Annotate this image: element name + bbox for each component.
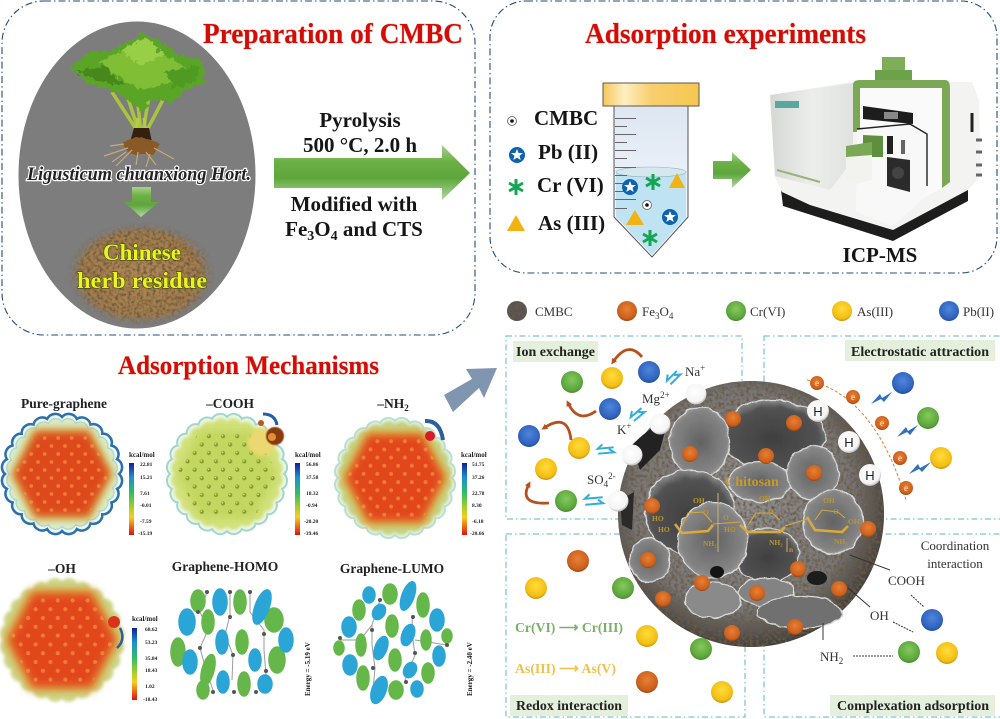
legend: ions: Cr (VI)	[537, 173, 604, 197]
species name: Ligusticum chuanxiong Hort.	[26, 164, 251, 185]
surface H sites: H	[865, 468, 875, 483]
panel: redox interaction	[506, 534, 745, 717]
map: pure graphene: Pure-graphene	[21, 396, 107, 411]
legend: particles: 4	[669, 311, 674, 321]
map: OH graphene: 18.43	[145, 668, 158, 674]
legend: particles	[507, 301, 994, 321]
instrument label: ICP-MS	[843, 243, 917, 267]
legend: particles: Pb(II)	[963, 304, 994, 319]
SEM particle	[618, 381, 884, 647]
map: NH2 graphene: -20.66	[470, 531, 484, 537]
title: adsorption mechanisms: Adsorption Mechanisms	[118, 351, 379, 380]
map: NH2 graphene: kcal/mol	[461, 451, 487, 459]
chart: graphene HOMO orbitals: Graphene-HOMO	[172, 559, 278, 574]
icon: ICP-MS instrument	[770, 57, 982, 241]
residue label line 2: herb residue	[77, 268, 207, 293]
chitosan structure: O	[833, 507, 839, 516]
legend: particles: CMBC	[535, 304, 573, 319]
chart: graphene LUMO orbitals	[334, 561, 474, 706]
modifier label: and CTS	[338, 217, 423, 241]
map: NH2 graphene: 37.26	[472, 475, 485, 481]
temperature label: 500 °C, 2.0 h	[303, 133, 417, 157]
complexation labels: NH	[820, 649, 839, 664]
attracted ions	[892, 372, 952, 469]
map: NH2 graphene	[335, 396, 487, 538]
legend: particles: 3	[655, 311, 660, 321]
label: complexation adsorption: Complexation adsorption	[837, 699, 989, 714]
chart: graphene LUMO orbitals: Graphene-LUMO	[340, 561, 444, 576]
label: electrostatic attraction	[845, 340, 995, 361]
complexed ions	[898, 609, 958, 664]
legend: ions: As (III)	[538, 211, 605, 235]
green ball at redox boundary	[612, 577, 634, 599]
ion labels: +	[700, 363, 705, 373]
chitosan structure: O	[723, 513, 729, 522]
chitosan structure: HO	[658, 525, 670, 534]
equilibrium arrows	[584, 368, 680, 505]
map: COOH graphene: 56.86	[306, 462, 319, 468]
electron arc: e	[851, 392, 855, 402]
map: NH2 graphene: 51.75	[472, 462, 485, 468]
panel: adsorption experiments	[490, 1, 997, 273]
chitosan structure: OH	[693, 496, 705, 505]
curved arrows	[526, 350, 642, 503]
map: COOH graphene: -0.94	[306, 503, 318, 509]
legend: ions: Pb (II)	[538, 140, 598, 164]
map: NH2 graphene: 22.78	[472, 491, 485, 497]
map: pure graphene: -15.19	[138, 531, 152, 537]
legend: particles: O	[660, 304, 669, 319]
electron arc: e	[815, 378, 819, 388]
ion labels: 4	[604, 479, 609, 489]
legend: particles: As(III)	[857, 304, 893, 319]
ion labels: 2-	[608, 471, 616, 481]
chitosan structure	[652, 493, 860, 554]
electron arc	[807, 376, 913, 500]
map: COOH graphene: –COOH	[205, 396, 254, 411]
electron arc: e	[898, 453, 902, 463]
modifier label: O	[314, 217, 331, 241]
chitosan label: Chitosan	[725, 475, 779, 490]
map: OH graphene: kcal/mol	[132, 615, 158, 623]
panel: mechanism diagram	[506, 301, 1000, 717]
map: NH2 graphene: 2	[404, 403, 409, 413]
residue label: Chinese	[103, 240, 181, 265]
chitosan structure: OH	[759, 494, 771, 503]
map: COOH graphene: 18.32	[306, 491, 319, 497]
chart: graphene HOMO orbitals: Energy = -5.19 eV	[304, 642, 312, 696]
map: OH graphene	[0, 561, 158, 703]
map: COOH graphene: 37.58	[306, 475, 319, 481]
ion labels: SO	[587, 472, 604, 487]
panel: complexation adsorption	[764, 534, 1000, 717]
ion labels: Na	[685, 364, 700, 379]
modifier label: 3	[307, 229, 314, 244]
legend: particles: Cr(VI)	[750, 304, 785, 319]
chitosan structure: NH₂	[703, 539, 717, 548]
map: pure graphene: -7.59	[140, 519, 152, 525]
icon: herb residue pile	[67, 222, 215, 326]
complexation labels: 2	[839, 656, 843, 666]
map: NH2 graphene: 8.30	[472, 503, 482, 509]
chitosan structure: NH₂	[834, 537, 848, 546]
pyrolysis label: Pyrolysis	[319, 108, 401, 132]
label: complexation adsorption	[830, 695, 995, 716]
map: COOH graphene	[167, 396, 321, 537]
chart: graphene HOMO orbitals	[171, 559, 312, 699]
label: ion exchange	[513, 341, 598, 362]
surface H sites: H	[844, 435, 854, 450]
map: OH graphene: 35.84	[145, 656, 158, 662]
chitosan structure: O	[768, 507, 774, 516]
chitosan structure: O	[703, 508, 709, 517]
map: pure graphene: 15.21	[140, 475, 153, 481]
reaction: chromium: Cr(VI) ⟶ Cr(III)	[515, 621, 623, 636]
chitosan structure: OH	[848, 517, 860, 526]
map: pure graphene: -0.01	[140, 503, 152, 509]
map: COOH graphene: kcal/mol	[295, 451, 321, 459]
surface H sites: H	[813, 404, 823, 419]
surface ions: white balls	[608, 384, 706, 512]
grey ellipse background	[18, 22, 256, 328]
complexation labels: OH	[870, 608, 889, 623]
chitosan structure: HO	[652, 514, 664, 523]
label: ion exchange: Ion exchange	[516, 345, 595, 360]
arrow: plant to residue	[124, 187, 159, 217]
electron arc: e	[904, 483, 908, 493]
panel: ion exchange	[506, 336, 742, 519]
title: adsorption experiments: Adsorption experiments	[585, 19, 866, 50]
arrow: to mechanisms	[444, 368, 497, 412]
map: pure graphene: 7.61	[140, 491, 150, 497]
arrow: pyrolysis	[274, 145, 470, 200]
map: OH graphene: 53.23	[145, 640, 158, 646]
ion labels: Mg	[642, 391, 660, 406]
map: pure graphene	[2, 396, 155, 537]
map: pure graphene: 22.81	[140, 462, 153, 468]
ion labels: +	[626, 421, 631, 431]
map: OH graphene: –OH	[47, 561, 76, 576]
ions exchanging	[518, 361, 660, 512]
label: redox interaction	[510, 695, 628, 716]
Fe3O4 nanoparticles	[640, 411, 876, 641]
chitosan structure: n	[789, 545, 794, 554]
legend: particles: Fe	[642, 304, 655, 319]
modifier label: 4	[331, 229, 338, 244]
ion labels: K	[617, 422, 626, 437]
complexation labels: Coordination	[921, 538, 990, 553]
map: OH graphene: 68.62	[145, 627, 158, 633]
complexation labels: interaction	[927, 556, 983, 571]
chitosan structure: HO	[724, 525, 736, 534]
map: pure graphene: kcal/mol	[129, 451, 155, 459]
map: OH graphene: 1.02	[145, 684, 155, 690]
complexation labels: COOH	[888, 573, 925, 588]
chitosan structure: OH	[823, 496, 835, 505]
modifier label: Fe	[285, 217, 307, 241]
legend: ions: CMBC	[534, 106, 598, 130]
title: preparation: Preparation of CMBC	[203, 18, 463, 50]
chart: graphene LUMO orbitals: Energy = -2.40 eV	[466, 642, 474, 696]
lightning bolts	[871, 392, 931, 474]
icon: centrifuge tube	[603, 83, 699, 257]
panel: adsorption mechanisms	[0, 351, 497, 706]
map: COOH graphene: -20.20	[304, 519, 318, 525]
reaction: arsenic: As(III) ⟶ As(V)	[515, 662, 616, 677]
label: electrostatic attraction: Electrostatic attraction	[851, 345, 989, 360]
legend: ions	[507, 106, 605, 235]
map: COOH graphene: -39.46	[304, 531, 318, 537]
ion labels	[587, 363, 705, 489]
complexation labels	[820, 538, 990, 666]
icon: Ligusticum plant	[69, 33, 204, 167]
complexation lines	[823, 555, 924, 656]
panel: electrostatic attraction	[764, 336, 1000, 519]
chitosan structure: NH₂	[769, 538, 783, 547]
surface H sites	[807, 400, 881, 486]
modification label: Modified with	[291, 192, 418, 216]
particles: redox	[525, 550, 733, 703]
map: OH graphene: -18.43	[143, 697, 157, 703]
map: NH2 graphene: –NH	[377, 396, 404, 411]
ion labels: 2+	[660, 390, 670, 400]
label: redox interaction: Redox interaction	[516, 699, 622, 714]
arrow: tube to instrument	[713, 152, 751, 188]
electron arc: e	[880, 418, 884, 428]
map: NH2 graphene: -6.18	[472, 519, 484, 525]
panel: preparation of CMBC	[2, 1, 475, 335]
